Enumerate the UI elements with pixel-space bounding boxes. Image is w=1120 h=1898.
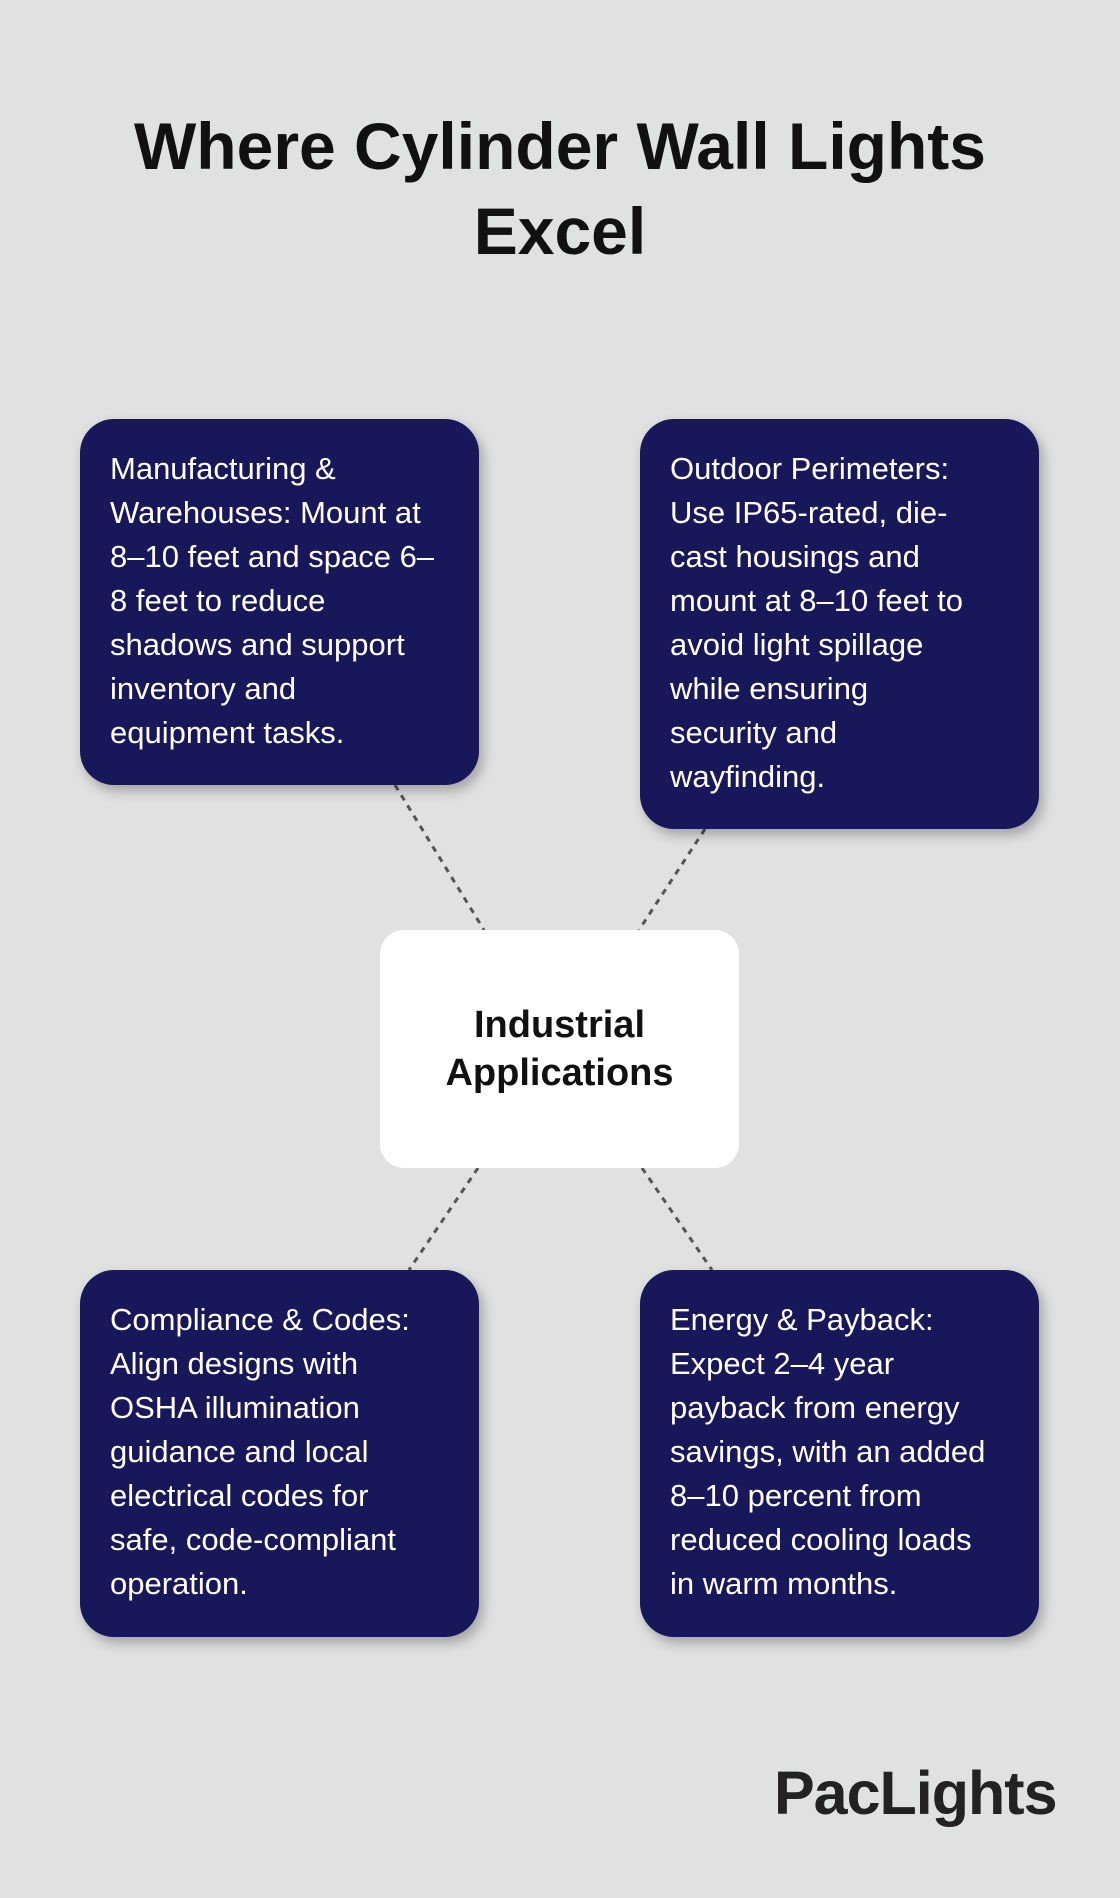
center node: Industrial <box>474 1004 645 1046</box>
panel: compliance: electrical codes for <box>110 1478 368 1513</box>
panel: compliance: Compliance & Codes: <box>110 1302 410 1337</box>
panel: outdoor perimeters: wayfinding. <box>670 759 825 794</box>
panel: outdoor perimeters: cast housings and <box>670 539 920 574</box>
panel: manufacturing: Warehouses: Mount at <box>110 495 421 530</box>
panel: compliance: OSHA illumination <box>110 1390 360 1425</box>
panel: outdoor perimeters: Use IP65-rated, die- <box>670 495 947 530</box>
panel: outdoor perimeters <box>640 419 1039 829</box>
center node <box>380 930 739 1168</box>
logo: PacLights <box>774 1759 1057 1827</box>
title: Excel <box>474 194 646 268</box>
title: Where Cylinder Wall Lights <box>134 109 986 183</box>
panel: compliance: guidance and local <box>110 1434 369 1469</box>
panel: energy: Energy & Payback: <box>670 1302 934 1337</box>
panel: energy: reduced cooling loads <box>670 1522 972 1557</box>
panel: compliance <box>80 1270 479 1637</box>
panel: outdoor perimeters: avoid light spillage <box>670 627 923 662</box>
panel: energy: 8–10 percent from <box>670 1478 922 1513</box>
center node: Applications <box>445 1052 674 1094</box>
panel: outdoor perimeters: mount at 8–10 feet to <box>670 583 963 618</box>
panel: outdoor perimeters: Outdoor Perimeters: <box>670 451 949 486</box>
title <box>134 109 986 268</box>
panel: energy <box>640 1270 1039 1637</box>
panel: manufacturing: equipment tasks. <box>110 715 344 750</box>
panel: energy: savings, with an added <box>670 1434 985 1469</box>
panel: energy: in warm months. <box>670 1566 897 1601</box>
panel: energy: payback from energy <box>670 1390 959 1425</box>
panel: compliance: operation. <box>110 1566 248 1601</box>
panel: compliance: safe, code-compliant <box>110 1522 396 1557</box>
panel: manufacturing: 8–10 feet and space 6– <box>110 539 434 574</box>
panel: manufacturing: 8 feet to reduce <box>110 583 325 618</box>
panel: manufacturing: Manufacturing & <box>110 451 336 486</box>
panel: outdoor perimeters: security and <box>670 715 837 750</box>
panel: outdoor perimeters: while ensuring <box>670 671 868 706</box>
panel: compliance: Align designs with <box>110 1346 358 1381</box>
panel: manufacturing <box>80 419 479 785</box>
panel: manufacturing: shadows and support <box>110 627 405 662</box>
panel: manufacturing: inventory and <box>110 671 296 706</box>
panel: energy: Expect 2–4 year <box>670 1346 894 1381</box>
